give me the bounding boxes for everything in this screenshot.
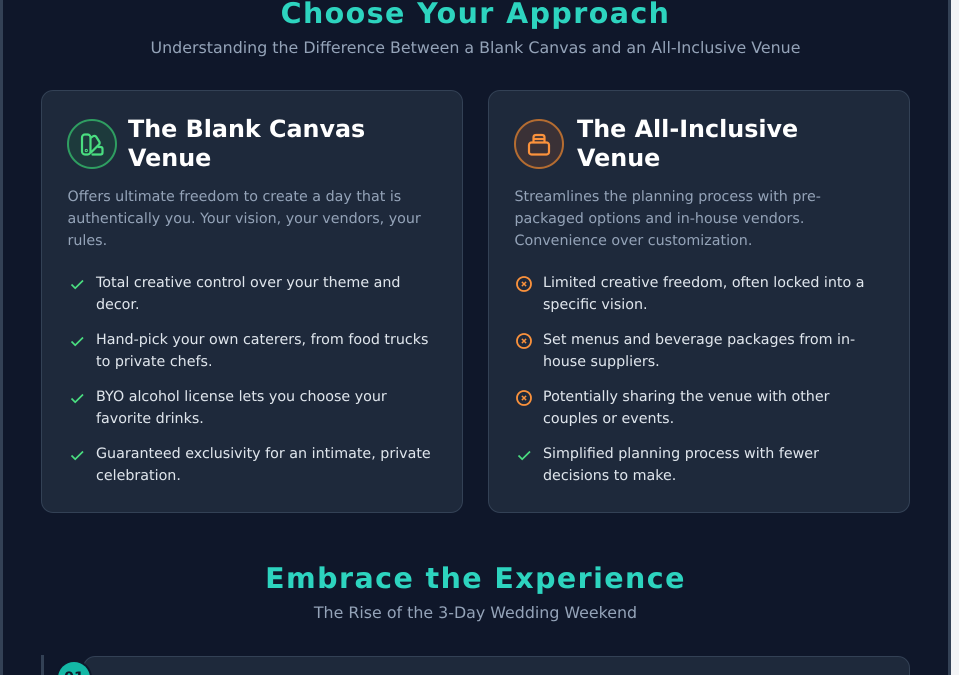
list item: exclusivity: celebration. — [96, 468, 181, 484]
list item: BYO alcohol: BYO alcohol license lets you choose your — [96, 388, 387, 404]
list item: set menus: Set menus and beverage packages from in- — [543, 332, 855, 348]
timeline line — [41, 655, 44, 675]
list item: limited freedom: Limited creative freedom, often locked into a — [543, 274, 865, 290]
description: blank canvas — [68, 188, 421, 248]
heading: blank canvas: Venue — [128, 144, 211, 172]
list item: exclusivity: Guaranteed exclusivity for an intimate, private — [96, 446, 431, 462]
panel: blank canvas venue — [41, 90, 463, 513]
list item: BYO alcohol — [71, 388, 387, 426]
icon: colour swatch — [67, 119, 117, 169]
list item: sharing venue — [516, 388, 830, 426]
list item: sharing venue: couples or events. — [543, 410, 674, 426]
list item: set menus: house suppliers. — [543, 354, 660, 370]
description: blank canvas: authentically you. Your vision, your vendors, your — [68, 210, 421, 226]
description: all-inclusive: Streamlines the planning process with pre- — [514, 188, 821, 204]
subtitle: embrace the experience: The Rise of the 3-Day Wedding Weekend — [314, 603, 637, 622]
description: all-inclusive: Convenience over customization. — [514, 232, 752, 248]
list item: sharing venue: Potentially sharing the venue with other — [543, 388, 829, 404]
heading: all-inclusive: The All-Inclusive — [577, 115, 798, 143]
list item: simplified planning — [518, 446, 819, 484]
description: blank canvas: rules. — [68, 232, 107, 248]
list item: limited freedom: specific vision. — [543, 296, 648, 312]
heading: all-inclusive: Venue — [577, 144, 660, 172]
heading: embrace the experience: Embrace the Experience — [265, 562, 686, 595]
heading: blank canvas: The Blank Canvas — [128, 115, 365, 143]
subtitle: choose your approach: Understanding the Difference Between a Blank Canvas and an All-Inclusive Venue — [151, 38, 800, 56]
description: blank canvas: Offers ultimate freedom to create a day that is — [68, 188, 401, 204]
list item: limited freedom — [516, 274, 865, 312]
timeline card — [83, 656, 910, 675]
list item: caterers: Hand-pick your own caterers, from food trucks — [96, 332, 428, 348]
description: all-inclusive: packaged options and in-house vendors. — [514, 210, 804, 226]
list item: simplified planning: decisions to make. — [543, 468, 676, 484]
list item: exclusivity — [71, 446, 431, 484]
list item: creative control: Total creative control over your theme and — [96, 274, 400, 290]
description: all-inclusive — [514, 188, 821, 248]
list item: creative control: decor. — [96, 296, 140, 312]
list item: set menus — [516, 332, 855, 370]
list item: caterers: to private chefs. — [96, 354, 212, 370]
heading: blank canvas — [128, 115, 365, 172]
list item: creative control — [71, 274, 400, 312]
list item: simplified planning: Simplified planning process with fewer — [543, 446, 819, 462]
heading: all-inclusive — [577, 115, 798, 172]
list item: BYO alcohol: favorite drinks. — [96, 410, 204, 426]
timeline badge: 01 — [58, 662, 90, 675]
list item: caterers — [71, 332, 428, 370]
icon: stacked box — [514, 119, 564, 169]
panel: all-inclusive venue — [488, 90, 910, 513]
